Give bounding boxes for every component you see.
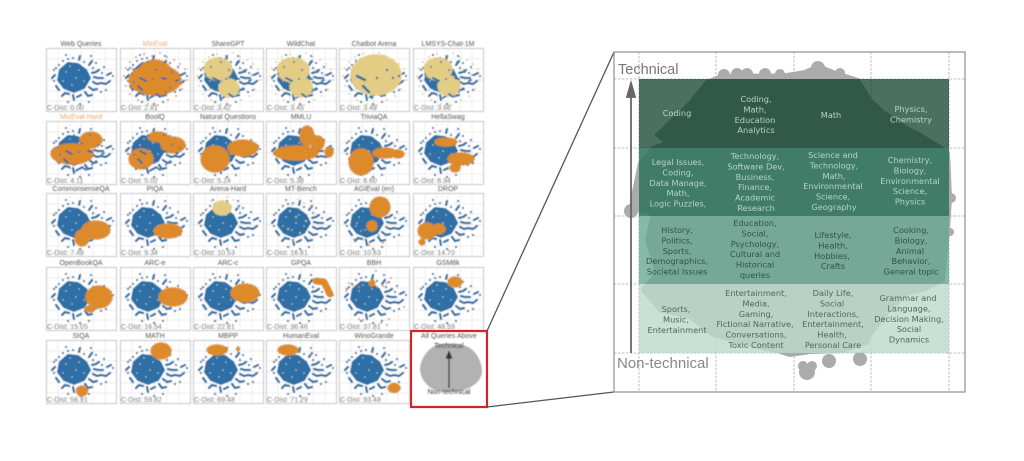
panel: Chatbot Arena [340, 41, 410, 112]
panel: All Queries Above [420, 333, 482, 396]
panel: topic map [614, 52, 965, 392]
panel: GPQA [266, 260, 336, 331]
row 3 band [639, 216, 949, 284]
panel: ShareGPT: C-Dist: 3.42 [194, 105, 231, 112]
panel: Chatbot Arena: Chatbot Arena [352, 41, 396, 48]
row 4 band [639, 284, 949, 353]
cell: Education Social: Education, [733, 218, 777, 228]
panel: SIQA [46, 333, 116, 404]
panel: MMLU [266, 114, 336, 185]
cell: Cooking Biology: Animal [896, 246, 924, 256]
cell: History Politics: History, [661, 225, 693, 235]
cell: Grammar and Language: Decision Making, [874, 314, 944, 324]
panel: MBPP: MBPP [218, 333, 238, 340]
cell: Lifestyle Health: Lifestyle, [814, 230, 852, 240]
cell: Grammar and Language: Social [897, 324, 921, 334]
cell: Entertainment Media: Entertainment, [725, 288, 787, 298]
panel: MixEval-Hard [46, 114, 116, 185]
panel: Web Queries: Web Queries [61, 41, 102, 48]
panel: TriviaQA: C-Dist: 6.60 [340, 178, 377, 185]
mini label technical: Technical [434, 343, 464, 350]
panel: MixEval-Hard: C-Dist: 4.11 [47, 178, 84, 185]
cell: Coding Math Education Analytics: Coding, [740, 94, 772, 104]
red highlight box [411, 331, 487, 407]
cell: Daily Life: Entertainment, [802, 319, 864, 329]
cell: Science and Technology: Science, [816, 192, 850, 202]
panel: DROP: C-Dist: 14.70 [414, 250, 455, 257]
cell: Entertainment Media: Gaming, [739, 309, 773, 319]
panel: MixEval: C-Dist: 2.81 [121, 105, 158, 112]
panel: GSM8k: C-Dist: 48.59 [414, 324, 455, 331]
cell: Math: Math [821, 110, 841, 120]
label: Technical: Technical [618, 62, 678, 78]
cell: Cooking Biology: General topic [883, 267, 939, 277]
cell: Legal Issues: Math, [666, 188, 690, 198]
panel: Chatbot Arena: C-Dist: 3.49 [340, 105, 377, 112]
cell: Sports Music: Entertainment [647, 325, 707, 335]
cell: Education Social: Social, [742, 228, 768, 238]
cell: Technology: Technology, [730, 151, 779, 161]
connector lines [487, 52, 614, 407]
panel: HellaSwag: HellaSwag [431, 114, 465, 121]
mini label non-technical: Non-technical [428, 389, 471, 396]
outer frame [614, 52, 965, 392]
panel: OpenBookQA: OpenBookQA [59, 260, 103, 267]
cell: Cooking Biology: Behavior, [892, 256, 930, 266]
panel: ShareGPT [194, 41, 264, 112]
cell: Coding Math Education Analytics: Analytics [737, 125, 775, 135]
panel: AGIEval (en): AGIEval (en) [354, 186, 394, 193]
cell: Lifestyle Health: Hobbies, [814, 251, 850, 261]
panel: Natural Questions [194, 114, 264, 185]
cell: Daily Life: Health, [817, 330, 847, 340]
panel: SIQA: C-Dist: 56.91 [47, 397, 88, 404]
panel: BoolQ: BoolQ [145, 114, 165, 121]
panel: ARC-c: ARC-c [218, 260, 239, 267]
panel: BoolQ: C-Dist: 5.02 [121, 178, 158, 185]
panel: GSM8k: GSM8k [436, 260, 460, 267]
cell: Technology: Academic [735, 193, 775, 203]
cell: Science and Technology: Environmental [803, 181, 863, 191]
cell: Daily Life: Interactions, [807, 309, 859, 319]
panel: LMSYS-Chat-1M: LMSYS-Chat-1M [422, 41, 475, 48]
panel: HellaSwag: C-Dist: 6.94 [414, 178, 451, 185]
cell: Grammar and Language: Language, [887, 303, 931, 313]
cell: History Politics: Sports, [663, 246, 691, 256]
cell: Lifestyle Health: Crafts [821, 261, 845, 271]
panel: DROP [414, 186, 484, 257]
panel: CommonsenseQA [46, 186, 116, 257]
cell: Coding: Coding [663, 108, 691, 118]
panel: HellaSwag [414, 114, 484, 185]
panel: HumanEval: HumanEval [283, 333, 320, 340]
cell: Chemistry Biology: Chemistry, [888, 155, 932, 165]
cell: Sports Music: Sports, [662, 304, 690, 314]
cell: Daily Life: Personal Care [805, 340, 861, 350]
cell: Technology: Business, [736, 172, 774, 182]
panel: BBH: BBH [367, 260, 381, 267]
panel: MATH: C-Dist: 59.82 [121, 397, 162, 404]
cell: Daily Life: Daily Life, [813, 288, 853, 298]
cell: Science and Technology: Technology, [809, 160, 858, 170]
cell: Legal Issues: Legal Issues, [652, 157, 704, 167]
panel: GSM8k [414, 260, 484, 331]
panel: MT-Bench: C-Dist: 16.61 [267, 250, 308, 257]
panel: WinoGrande [340, 333, 410, 404]
panel: Web Queries [46, 41, 116, 112]
panel: PIQA: C-Dist: 9.34 [121, 250, 158, 257]
cell: Grammar and Language: Grammar and [879, 293, 937, 303]
panel: OpenBookQA: C-Dist: 15.05 [47, 324, 88, 331]
panel: MATH [120, 333, 190, 404]
dashed grid [614, 52, 965, 392]
cell: Chemistry Biology: Environmental [880, 176, 940, 186]
panel: MixEval: MixEval [143, 41, 168, 48]
cell: Technology: Software Dev, [727, 161, 785, 171]
cell: Entertainment Media: Media, [742, 298, 770, 308]
cell: Education Social: Cultural and [730, 249, 780, 259]
panel: GPQA: C-Dist: 36.46 [267, 324, 308, 331]
panel: PIQA [120, 186, 190, 257]
panel: CommonsenseQA: C-Dist: 7.48 [47, 250, 84, 257]
panel: Arena-Hard: C-Dist: 10.53 [194, 250, 235, 257]
cell: Science and Technology: Geography [811, 202, 857, 212]
cell: Physics Chemistry: Chemistry [890, 114, 932, 124]
cell: Entertainment Media: Fictional Narrative, [716, 319, 794, 329]
panel: Arena-Hard: Arena-Hard [210, 186, 246, 193]
cell: Chemistry Biology: Science, [893, 186, 927, 196]
cell: Education Social: Historical [736, 260, 774, 270]
panel: DROP: DROP [438, 186, 458, 193]
panel: MBPP: C-Dist: 69.48 [194, 397, 235, 404]
panel: AGIEval (en) [340, 186, 410, 257]
panel: WildChat: WildChat [287, 41, 315, 48]
cell: Science and Technology: Math, [822, 171, 846, 181]
gray cloud of all queries [420, 343, 482, 392]
panel: Arena-Hard [194, 186, 264, 257]
panel: CommonsenseQA: CommonsenseQA [52, 186, 110, 193]
cell: Lifestyle Health: Health, [818, 240, 848, 250]
panel: LMSYS-Chat-1M [414, 41, 484, 112]
cell: Grammar and Language: Dynamics [889, 335, 929, 345]
panel: HumanEval: C-Dist: 71.29 [267, 397, 308, 404]
panel: MT-Bench: MT-Bench [285, 186, 317, 193]
panel: Web Queries: C-Dist: 0.00 [47, 105, 84, 112]
cell: Legal Issues: Coding, [662, 167, 694, 177]
cell: History Politics: Societal Issues [647, 267, 707, 277]
panel: TriviaQA: TriviaQA [361, 114, 388, 121]
panel: WinoGrande: C-Dist: 93.48 [340, 397, 381, 404]
cell: Education Social: Psychology, [731, 239, 779, 249]
panel: MixEval-Hard: MixEval-Hard [60, 114, 102, 121]
cell: Education Social: queries [740, 270, 770, 280]
cell: Chemistry Biology: Physics [895, 197, 925, 207]
panel: MT-Bench [266, 186, 336, 257]
panel: SIQA: SIQA [73, 333, 90, 340]
panel: LMSYS-Chat-1M: C-Dist: 3.66 [414, 105, 451, 112]
panel: MixEval [120, 41, 190, 112]
panel: MMLU: C-Dist: 5.38 [267, 178, 304, 185]
cell: Technology: Research [737, 203, 775, 213]
panel: TriviaQA [340, 114, 410, 185]
mini arrow [446, 352, 452, 388]
panel: BBH: C-Dist: 37.81 [340, 324, 381, 331]
cell: Physics Chemistry: Physics, [895, 104, 927, 114]
label: Non-technical: Non-technical [617, 355, 709, 372]
cell: Entertainment Media: Conversations, [726, 330, 786, 340]
cell: History Politics: Demographics, [646, 256, 708, 266]
gray query cloud [626, 63, 954, 378]
panel: WinoGrande: WinoGrande [354, 333, 394, 340]
panel: ARC-e: ARC-e [144, 260, 166, 267]
panel: WildChat [266, 41, 336, 112]
cell: Science and Technology: Science and [808, 150, 858, 160]
cell: History Politics: Politics, [661, 235, 693, 245]
cell: Daily Life: Social [820, 298, 844, 308]
panel: MMLU: MMLU [291, 114, 311, 121]
cell: Chemistry Biology: Biology, [894, 165, 926, 175]
panel: Natural Questions: C-Dist: 5.24 [194, 178, 231, 185]
cell: Coding Math Education Analytics: Math, [743, 104, 767, 114]
panel: MBPP [194, 333, 264, 404]
cell: Cooking Biology: Cooking, [893, 225, 929, 235]
panel: ARC-e [120, 260, 190, 331]
panel: MATH: MATH [145, 333, 165, 340]
cell: Legal Issues: Logic Puzzles, [650, 199, 706, 209]
cell: Cooking Biology: Biology, [895, 235, 927, 245]
cell: Technology: Finance, [738, 182, 772, 192]
panel: AGIEval (en): C-Dist: 10.63 [340, 250, 381, 257]
panel: HumanEval [266, 333, 336, 404]
panel: BoolQ [120, 114, 190, 185]
cell: Legal Issues: Data Manage, [649, 178, 707, 188]
panel: ARC-c [194, 260, 264, 331]
panel: WildChat: C-Dist: 3.45 [267, 105, 304, 112]
scatter grid of datasets [46, 41, 484, 404]
cell: Coding Math Education Analytics: Education [735, 115, 775, 125]
cell: Entertainment Media: Toxic Content [727, 340, 784, 350]
panel: PIQA: PIQA [147, 186, 164, 193]
panel: BBH [340, 260, 410, 331]
cell: Sports Music: Music, [663, 314, 689, 324]
panel: OpenBookQA [46, 260, 116, 331]
panel: ARC-c: C-Dist: 22.61 [194, 324, 235, 331]
panel: GPQA: GPQA [291, 260, 311, 267]
panel: ShareGPT: ShareGPT [211, 41, 245, 48]
axis arrow [627, 83, 635, 353]
panel: All Queries Above: All Queries Above [421, 333, 477, 340]
panel: Natural Questions: Natural Questions [200, 114, 257, 121]
panel: ARC-e: C-Dist: 16.54 [121, 324, 162, 331]
row 1 band [639, 79, 949, 148]
row 2 band [639, 148, 949, 216]
